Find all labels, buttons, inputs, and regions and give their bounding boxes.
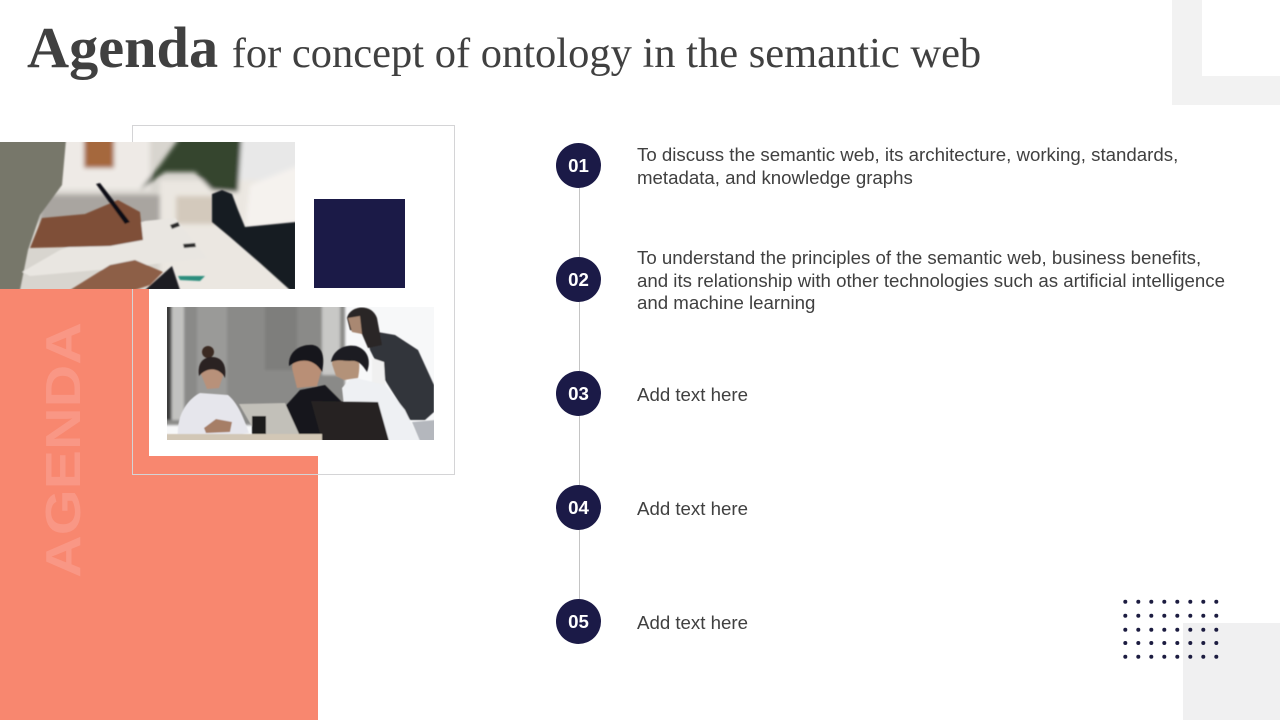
agenda item 02 badge bbox=[556, 257, 601, 302]
agenda item 02 text: To understand the principles of the semantic web, business benefits, bbox=[637, 247, 1201, 268]
agenda item 05 text: Add text here bbox=[637, 612, 748, 633]
agenda item 01 badge: 01 bbox=[568, 155, 589, 176]
panel: salmon background bbox=[0, 289, 318, 720]
agenda item 03 text: Add text here bbox=[637, 384, 748, 405]
panel: thin outlined frame bbox=[132, 125, 455, 475]
agenda item 02 text: and machine learning bbox=[637, 292, 815, 313]
title: Agenda for concept of ontology in the semantic web bbox=[27, 15, 981, 80]
timeline connector line bbox=[578, 165, 580, 621]
agenda item 03 badge: 03 bbox=[568, 383, 589, 404]
agenda item 01 text bbox=[637, 144, 1178, 188]
agenda item 01 text: To discuss the semantic web, its architecture, working, standards, bbox=[637, 144, 1178, 165]
vertical watermark: AGENDA: AGENDA bbox=[35, 322, 91, 578]
agenda item 02 text: and its relationship with other technologies such as artificial intelligence bbox=[637, 270, 1225, 290]
agenda item 01 badge bbox=[556, 143, 601, 188]
agenda item 04 text: Add text here bbox=[637, 498, 748, 519]
agenda item 03 badge bbox=[556, 371, 601, 416]
corner decoration: bottom right bbox=[1183, 623, 1280, 720]
decorative dot grid bbox=[1123, 600, 1218, 659]
agenda item 05 badge: 05 bbox=[568, 611, 589, 632]
navy square bbox=[314, 199, 405, 288]
agenda item 02 badge: 02 bbox=[568, 269, 589, 290]
agenda item 05 badge bbox=[556, 599, 601, 644]
agenda item 02 text bbox=[637, 247, 1225, 313]
photo: team meeting with laptops bbox=[167, 307, 434, 440]
agenda item 01 text: metadata, and knowledge graphs bbox=[637, 166, 913, 188]
photo: hands writing on clipboard bbox=[0, 142, 295, 289]
corner decoration: top right bbox=[1172, 0, 1280, 105]
agenda item 04 badge bbox=[556, 485, 601, 530]
agenda item 04 badge: 04 bbox=[568, 497, 589, 518]
panel: white photo backing bbox=[149, 289, 435, 456]
